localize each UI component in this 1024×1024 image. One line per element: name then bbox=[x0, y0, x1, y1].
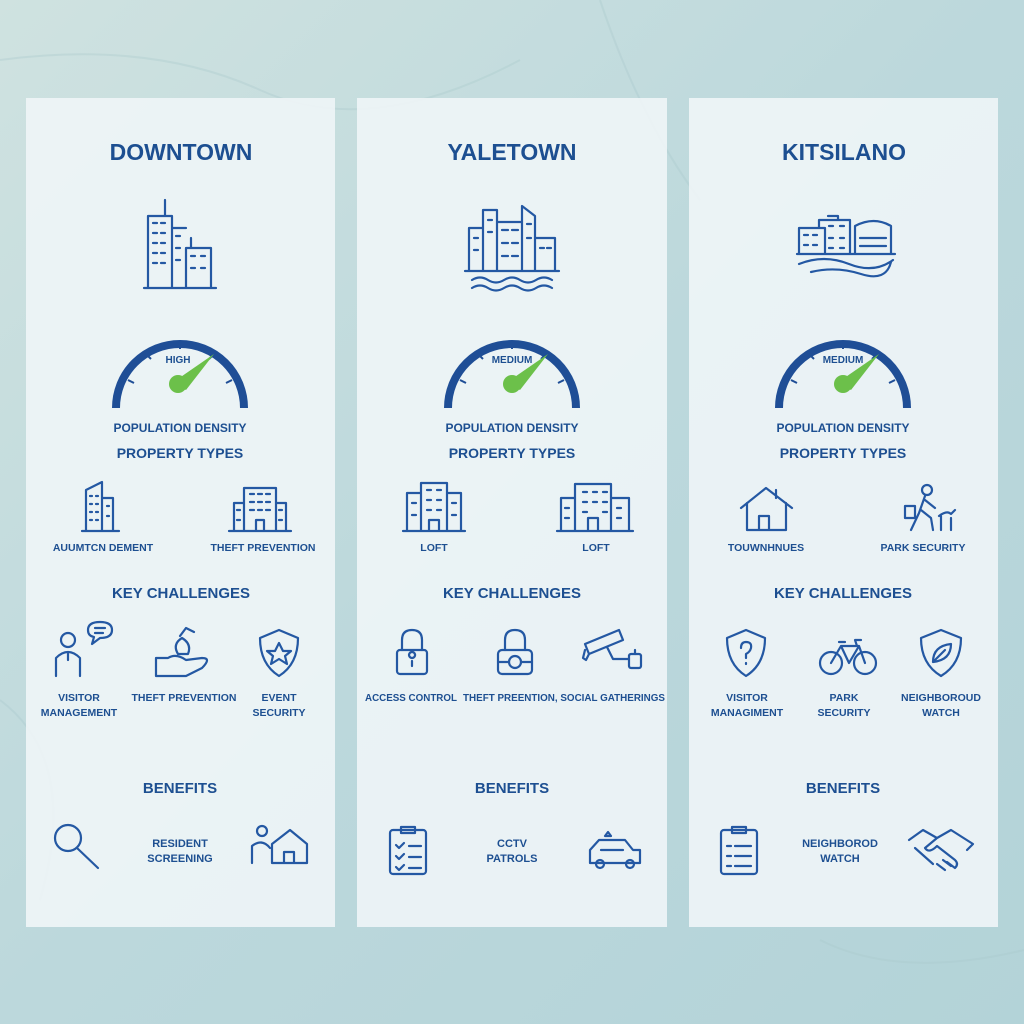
heading: yaletown: YALETOWN bbox=[447, 139, 577, 165]
gauge: high bbox=[116, 342, 244, 408]
gauge: medium: MEDIUM bbox=[823, 355, 863, 366]
heading: key challenges: KEY CHALLENGES bbox=[112, 585, 250, 602]
property: apartment: AUUMTCN DEMENT bbox=[53, 542, 154, 554]
challenge: visitor management: MANAGIMENT bbox=[711, 707, 784, 719]
benefit: checklist bbox=[390, 827, 426, 874]
challenge: visitor management: MANAGEMENT bbox=[41, 707, 118, 719]
challenge: theft prevention bbox=[463, 630, 665, 704]
benefit: resident screening bbox=[147, 838, 213, 865]
challenge: theft prevention: THEFT PREENTION, SOCIAL GATHERINGS bbox=[463, 693, 665, 704]
benefit: neighborhood watch: WATCH bbox=[820, 853, 860, 865]
heading: property types: PROPERTY TYPES bbox=[117, 445, 243, 461]
benefit: checklist bbox=[721, 827, 757, 874]
challenge: neighbourhood watch: WATCH bbox=[922, 707, 960, 719]
property: townhouse bbox=[728, 488, 804, 554]
challenge: access control: ACCESS CONTROL bbox=[365, 693, 457, 704]
icon: beach buildings bbox=[797, 216, 895, 276]
gauge: high: HIGH bbox=[166, 355, 190, 366]
heading: downtown: DOWNTOWN bbox=[110, 139, 252, 165]
property: loft 1: LOFT bbox=[420, 542, 448, 554]
property: apartment bbox=[53, 482, 154, 554]
benefit: resident screening: SCREENING bbox=[147, 853, 213, 865]
challenge: access control bbox=[365, 630, 457, 704]
challenge: visitor management bbox=[41, 622, 118, 719]
property: loft 2: LOFT bbox=[582, 542, 610, 554]
heading: key challenges: KEY CHALLENGES bbox=[774, 585, 912, 602]
heading: property types: PROPERTY TYPES bbox=[449, 445, 575, 461]
label: population density: POPULATION DENSITY bbox=[445, 421, 579, 435]
challenge: park security bike: SECURITY bbox=[817, 707, 871, 719]
heading: benefits: BENEFITS bbox=[475, 780, 549, 797]
property: townhouse: TOUWNHNUES bbox=[728, 542, 804, 554]
panel: yaletown bbox=[357, 98, 667, 927]
heading: kitsilano: KITSILANO bbox=[782, 139, 906, 165]
icon: skyscrapers bbox=[144, 200, 216, 288]
benefit: neighborhood watch: NEIGHBOROD bbox=[802, 838, 878, 850]
gauge: medium bbox=[779, 342, 907, 408]
benefit: resident screening: RESIDENT bbox=[152, 838, 208, 850]
challenge: visitor management bbox=[711, 630, 784, 719]
heading: benefits: BENEFITS bbox=[143, 780, 217, 797]
benefit: handshake bbox=[909, 830, 973, 870]
panel: kitsilano bbox=[689, 98, 998, 927]
property: block bbox=[210, 488, 316, 554]
heading: property types: PROPERTY TYPES bbox=[780, 445, 906, 461]
challenge: theft prevention: THEFT PREVENTION bbox=[131, 692, 237, 704]
challenge: visitor management: VISITOR bbox=[726, 692, 768, 704]
benefit: cctv patrols: CCTV bbox=[497, 838, 528, 850]
challenge: visitor management: VISITOR bbox=[58, 692, 100, 704]
benefit: patrol car bbox=[590, 832, 640, 868]
challenge: event security: SECURITY bbox=[252, 707, 306, 719]
challenge: cctv bbox=[583, 630, 641, 668]
challenge: event security: EVENT bbox=[261, 692, 297, 704]
property: park security: PARK SECURITY bbox=[881, 542, 965, 554]
challenge: park security bike: PARK bbox=[830, 692, 859, 704]
challenge: event security bbox=[252, 630, 306, 719]
property: block: THEFT PREVENTION bbox=[210, 542, 316, 554]
property: park security bbox=[881, 485, 965, 554]
icon: waterfront towers bbox=[465, 206, 559, 290]
heading: key challenges: KEY CHALLENGES bbox=[443, 585, 581, 602]
label: population density: POPULATION DENSITY bbox=[776, 421, 910, 435]
gauge: medium bbox=[448, 342, 576, 408]
benefit: cctv patrols: PATROLS bbox=[487, 853, 537, 865]
benefit: magnifier bbox=[55, 825, 98, 868]
benefit: neighborhood watch bbox=[802, 838, 878, 865]
property: loft 2 bbox=[557, 484, 633, 554]
challenge: neighbourhood watch: NEIGHBOROUD bbox=[901, 692, 981, 704]
benefit: cctv patrols bbox=[487, 838, 537, 865]
challenge: neighbourhood watch bbox=[901, 630, 981, 719]
panel: downtown bbox=[26, 98, 335, 927]
benefit: home bbox=[252, 826, 307, 863]
gauge: medium: MEDIUM bbox=[492, 355, 532, 366]
label: population density: POPULATION DENSITY bbox=[113, 421, 247, 435]
challenge: theft prevention bbox=[131, 628, 237, 704]
property: loft 1 bbox=[403, 483, 465, 554]
heading: benefits: BENEFITS bbox=[806, 780, 880, 797]
challenge: park security bike bbox=[817, 640, 876, 719]
